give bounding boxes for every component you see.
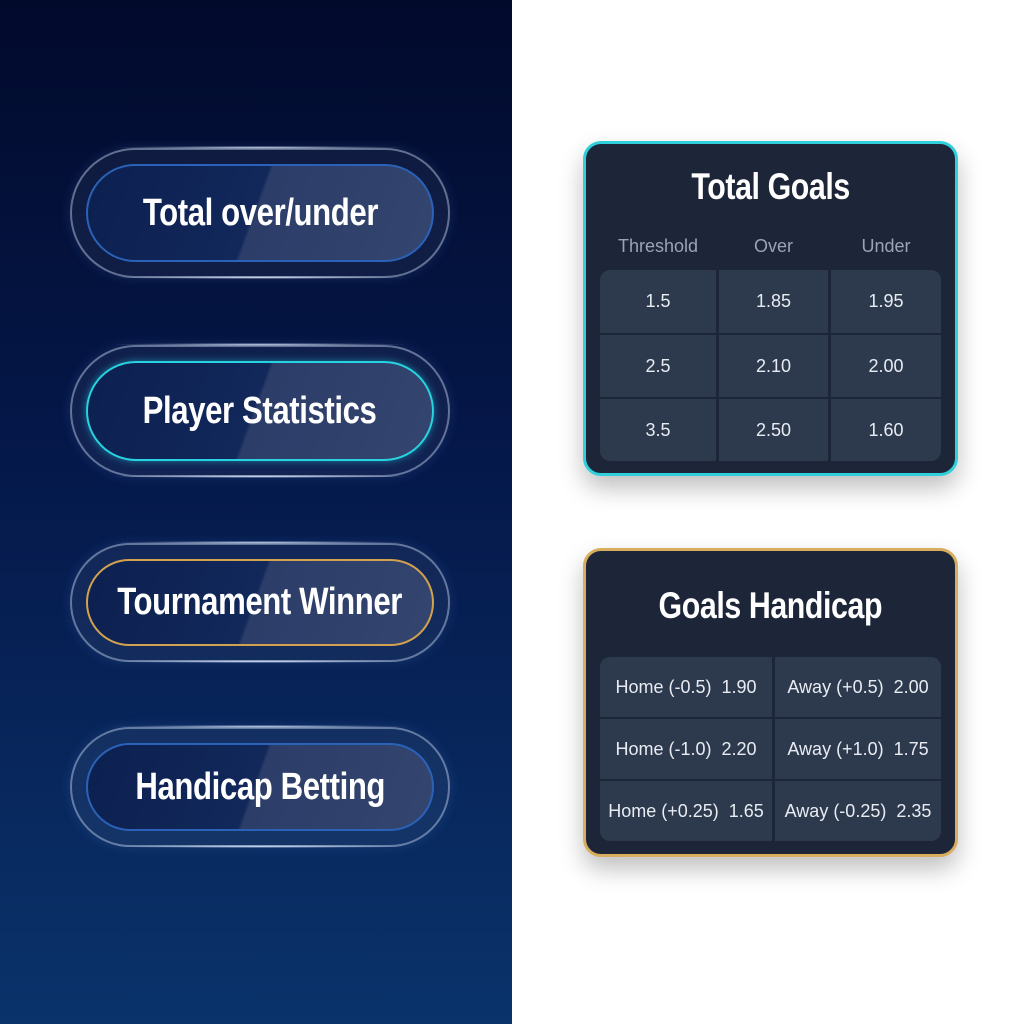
pill: Player Statistics <box>70 345 450 477</box>
table: handicap odds: Home (-0.5) 1.90 <box>615 676 757 696</box>
pill: Tournament Winner <box>70 543 450 662</box>
table headers: Threshold <box>618 236 698 256</box>
table: handicap odds: Home (+0.25) 1.65 <box>608 800 764 820</box>
pill: Handicap Betting <box>70 727 450 847</box>
pill: Tournament Winner: Tournament Winner <box>118 581 402 623</box>
table: goals odds: 2.50 <box>756 420 791 440</box>
table: goals odds: 1.85 <box>756 291 791 311</box>
table: goals odds: 3.5 <box>645 420 671 440</box>
table: handicap odds: Home (-1.0) 2.20 <box>615 738 757 758</box>
table: goals odds: 1.60 <box>868 420 904 440</box>
table: goals odds: 2.10 <box>756 356 791 376</box>
table headers: Under <box>861 236 911 256</box>
card: Goals Handicap <box>583 548 958 857</box>
table: goals odds: 1.95 <box>868 291 904 311</box>
table: handicap odds: Away (+1.0) 1.75 <box>787 738 929 758</box>
table: goals odds: 1.5 <box>645 291 671 311</box>
panel: left dark background <box>0 0 512 1024</box>
table headers: Over <box>754 236 793 256</box>
pill: Total over/under <box>70 148 450 278</box>
table: goals odds: 2.00 <box>868 356 904 376</box>
table headers <box>618 236 911 256</box>
table: handicap odds: Away (-0.25) 2.35 <box>785 800 931 820</box>
pill: Player Statistics: Player Statistics <box>143 390 377 432</box>
card: Total Goals <box>583 141 958 476</box>
heading: Total Goals: Total Goals <box>691 166 850 207</box>
table: goals odds <box>600 270 941 461</box>
table: handicap odds <box>600 657 941 841</box>
heading: Goals Handicap: Goals Handicap <box>659 585 882 626</box>
pill: Handicap Betting: Handicap Betting <box>135 766 385 808</box>
table: handicap odds: Away (+0.5) 2.00 <box>787 676 929 696</box>
table: goals odds: 2.5 <box>645 356 671 376</box>
pill: Total over/under: Total over/under <box>142 192 378 234</box>
